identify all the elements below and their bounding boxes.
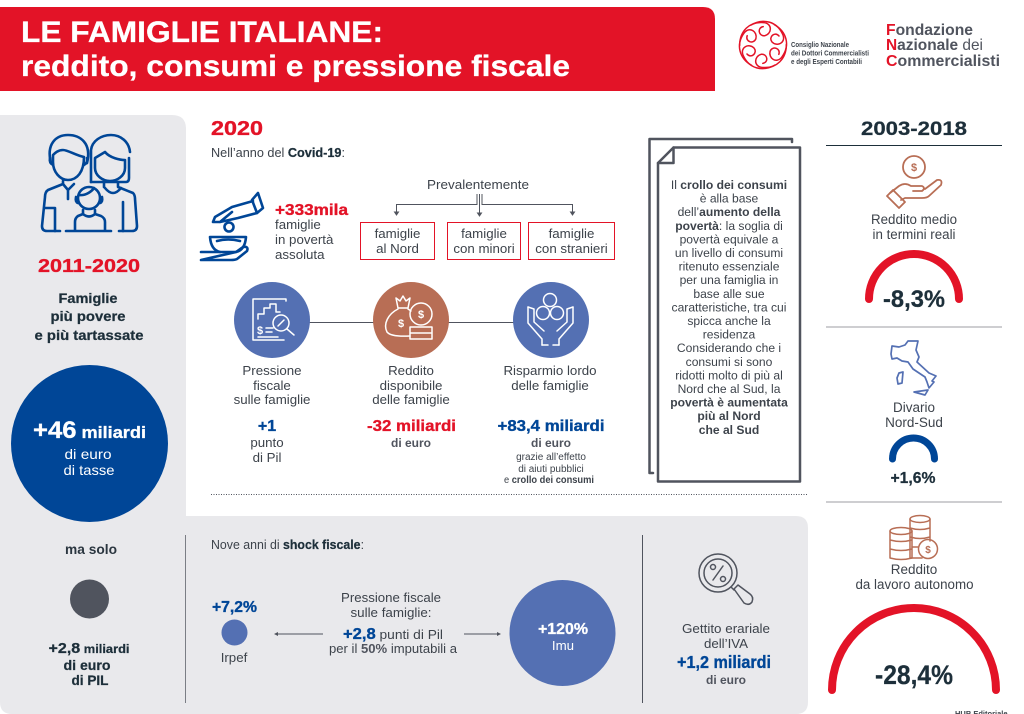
text: +2,8 miliardi <box>48 640 130 688</box>
logo: Fondazione Nazionale dei Commercialisti: Commercialisti <box>886 53 1000 70</box>
intro text: Nove anni di shock fiscale: <box>211 537 364 552</box>
note text: consumi si sono <box>686 355 773 369</box>
metric: Reddito disponibile: disponibile <box>380 378 442 393</box>
bubble: Irpef: +7,2% <box>212 599 257 616</box>
note text: povertà: la soglia di <box>675 219 783 233</box>
intro text: Nell’anno del Covid-19: <box>211 145 345 160</box>
logo: Consiglio Nazionale <box>732 15 869 75</box>
metric: Risparmio lordo <box>498 282 604 486</box>
metric: Risparmio lordo: di euro <box>531 436 571 450</box>
bubble: Imu: +120% <box>538 621 588 638</box>
text: +333mila: famiglie <box>275 217 321 232</box>
section: 2020 <box>201 118 614 486</box>
logo: Fondazione Nazionale dei Commercialisti: Fondazione <box>886 22 973 39</box>
metric: Risparmio lordo: e crollo dei consumi <box>504 475 594 486</box>
bubble: Imu <box>510 580 616 686</box>
text: ma solo: ma solo <box>65 541 117 557</box>
label: reddito medio <box>871 212 957 242</box>
metric: Pressione fiscale: +1 <box>258 418 276 435</box>
text: +2,8 miliardi: +2,8 miliardi <box>48 640 130 657</box>
title: LE FAMIGLIE ITALIANE: <box>21 16 383 49</box>
metric: Risparmio lordo: di aiuti pubblici <box>518 464 584 475</box>
label: reddito medio: Reddito medio <box>871 212 957 227</box>
box: famiglie al Nord: al Nord <box>376 241 419 256</box>
circle: GDP growth <box>70 580 109 618</box>
logo text: dei Dottori Commercialisti <box>791 48 869 58</box>
box: famiglie con stranieri: con stranieri <box>535 241 608 256</box>
text: gettito IVA <box>677 621 771 687</box>
note text: per una famiglia in <box>680 273 778 287</box>
metric: Risparmio lordo: +83,4 miliardi <box>498 418 604 435</box>
box: famiglie con minori: famiglie <box>461 226 507 241</box>
note text: Considerando che i <box>677 341 781 355</box>
gauge: -8,3%: -8,3% <box>883 286 945 313</box>
panel: grey background left and bottom <box>0 115 808 714</box>
panel: shock fiscale <box>211 535 771 703</box>
icon: Italy map <box>891 341 936 395</box>
label: divario: Divario <box>893 400 935 415</box>
icon: family <box>42 135 137 231</box>
metric: Pressione fiscale: $ <box>257 325 263 337</box>
text: pressione fiscale <box>329 590 458 656</box>
text: pressione fiscale: Pressione fiscale <box>341 590 441 605</box>
icon: magnifier with percent <box>699 554 753 604</box>
gauge: +1,6% <box>890 438 936 487</box>
label: reddito da lavoro <box>856 562 974 592</box>
document outline <box>650 139 800 482</box>
note text <box>670 178 788 437</box>
gauge: -28,4% <box>832 608 996 690</box>
logo text <box>791 40 869 66</box>
metric: Pressione fiscale: punto <box>250 435 284 450</box>
text: families poorer and more taxed: Famiglie <box>58 290 118 306</box>
title <box>21 16 570 83</box>
text: families poorer and more taxed: più povere <box>50 308 126 324</box>
box: famiglie al Nord: famiglie <box>375 226 420 241</box>
metric: Risparmio lordo: grazie all’effetto <box>516 452 586 463</box>
circle: +46 miliardi: di tasse <box>64 462 115 478</box>
note text: caratteristiche, tra cui <box>672 300 786 314</box>
note text: un livello di consumi <box>675 246 783 260</box>
note text: povertà è aumentata <box>670 396 788 410</box>
logo text: Consiglio Nazionale <box>791 40 849 49</box>
text: +333mila <box>275 202 348 262</box>
note text: Il crollo dei consumi <box>671 178 787 192</box>
icon: hand with coin <box>887 156 942 208</box>
period heading: 2011-2020 <box>38 255 140 276</box>
note text: che al Sud <box>699 423 759 437</box>
metric: Reddito disponibile: Reddito <box>388 363 434 378</box>
note text: Nord che al Sud, la <box>678 382 781 396</box>
bracket arrows <box>394 194 574 216</box>
metric: Risparmio lordo: Risparmio lordo <box>503 363 597 378</box>
text: +2,8 miliardi: di euro <box>64 657 110 673</box>
note text: ritenuto essenziale <box>679 260 780 274</box>
label: divario: Nord-Sud <box>885 415 943 430</box>
bubble: Imu: Imu <box>552 638 574 653</box>
column: 2003-2018: $ <box>911 162 917 174</box>
icon: tax report <box>253 299 294 340</box>
note text: spicca anche la <box>687 314 771 328</box>
label: reddito da lavoro: da lavoro autonomo <box>856 577 974 592</box>
metric: Reddito disponibile <box>367 282 456 450</box>
note text: base alle sue <box>693 287 765 301</box>
gauge: -28,4%: -28,4% <box>875 660 953 690</box>
heading: Prevalentemente: Prevalentemente <box>427 177 529 192</box>
metric: Pressione fiscale: sulle famiglie <box>234 392 310 407</box>
note text: più al Nord <box>697 409 761 423</box>
section heading: 2020 <box>211 118 263 140</box>
metric: Reddito disponibile: $ <box>398 318 404 330</box>
logo: Fondazione Nazionale dei Commercialisti <box>886 22 1000 70</box>
metric: Reddito disponibile: $ <box>418 309 424 321</box>
box: famiglie con stranieri: famiglie <box>549 226 594 241</box>
bubble: Irpef <box>212 599 257 665</box>
box: famiglie con minori: con minori <box>453 241 515 256</box>
gauge: +1,6%: +1,6% <box>890 470 936 487</box>
metric: Pressione fiscale: di Pil <box>253 450 281 465</box>
icon: coin stacks <box>890 516 938 560</box>
metric: Pressione fiscale: fiscale <box>253 378 291 393</box>
note text: è alla base <box>700 192 759 206</box>
icon: money bag and coins <box>386 296 432 339</box>
text: +333mila: assoluta <box>275 247 325 262</box>
arrow: to Imu <box>464 632 501 636</box>
metric: Reddito disponibile: delle famiglie <box>372 392 450 407</box>
text: pressione fiscale: sulle famiglie: <box>350 605 432 620</box>
metric: Reddito disponibile: di euro <box>391 436 431 450</box>
note text: residenza <box>703 328 755 342</box>
label: reddito medio: in termini reali <box>872 227 956 242</box>
connector line <box>272 322 551 324</box>
metric: Pressione fiscale <box>234 282 310 465</box>
text: pressione fiscale: per il 50% imputabili a <box>329 641 458 656</box>
text: gettito IVA: di euro <box>706 673 746 687</box>
text: gettito IVA: +1,2 miliardi <box>677 652 771 672</box>
bubble: Irpef: Irpef <box>221 650 248 665</box>
logo: Fondazione Nazionale dei Commercialisti: Nazionale dei <box>886 37 983 54</box>
column: 2003-2018: $ <box>925 545 931 556</box>
label: divario <box>885 400 943 430</box>
metric: Reddito disponibile: -32 miliardi <box>367 418 456 435</box>
icon: knot emblem <box>732 15 794 75</box>
divider: left vertical <box>184 535 186 703</box>
column heading: 2003-2018 <box>861 119 967 140</box>
text: +2,8 miliardi: di PIL <box>72 672 109 688</box>
text: families poorer and more taxed: e più tartassate <box>34 327 144 343</box>
circle: +46 miliardi: +46 miliardi <box>33 417 146 444</box>
document note <box>650 139 800 482</box>
box: famiglie con stranieri <box>528 222 614 260</box>
arrow: to Irpef <box>274 632 323 636</box>
metric: Pressione fiscale: Pressione <box>242 363 302 378</box>
circle: +46 miliardi <box>11 365 168 522</box>
icon: hand dropping coin in bowl <box>201 193 263 260</box>
note text: ridotti molto di più al <box>675 368 783 382</box>
text: +333mila: +333mila <box>275 202 348 219</box>
logo text: e degli Esperti Contabili <box>791 57 862 66</box>
dotted separator <box>211 494 807 496</box>
box: famiglie con minori <box>448 222 520 260</box>
metric: Risparmio lordo: delle famiglie <box>511 378 589 393</box>
box: famiglie al Nord <box>360 222 434 260</box>
label: reddito da lavoro: Reddito <box>891 562 937 577</box>
circle: +46 miliardi: di euro <box>64 446 112 462</box>
text: gettito IVA: dell’IVA <box>704 636 748 651</box>
title: reddito, consumi e pressione fiscale <box>21 50 570 83</box>
text: +333mila: in povertà <box>275 232 334 247</box>
text: families poorer and more taxed <box>34 290 144 343</box>
text: pressione fiscale: +2,8 punti di Pil <box>343 626 443 643</box>
gauge: -8,3% <box>869 254 959 313</box>
panel: 2011-2020 <box>11 135 168 688</box>
icon: hands holding coins <box>528 294 573 345</box>
text: gettito IVA: Gettito erariale <box>682 621 770 636</box>
note text: povertà equivale a <box>680 232 779 246</box>
header banner <box>0 7 715 91</box>
note text: dell’aumento della <box>678 205 781 219</box>
column: 2003-2018 <box>826 119 1008 714</box>
